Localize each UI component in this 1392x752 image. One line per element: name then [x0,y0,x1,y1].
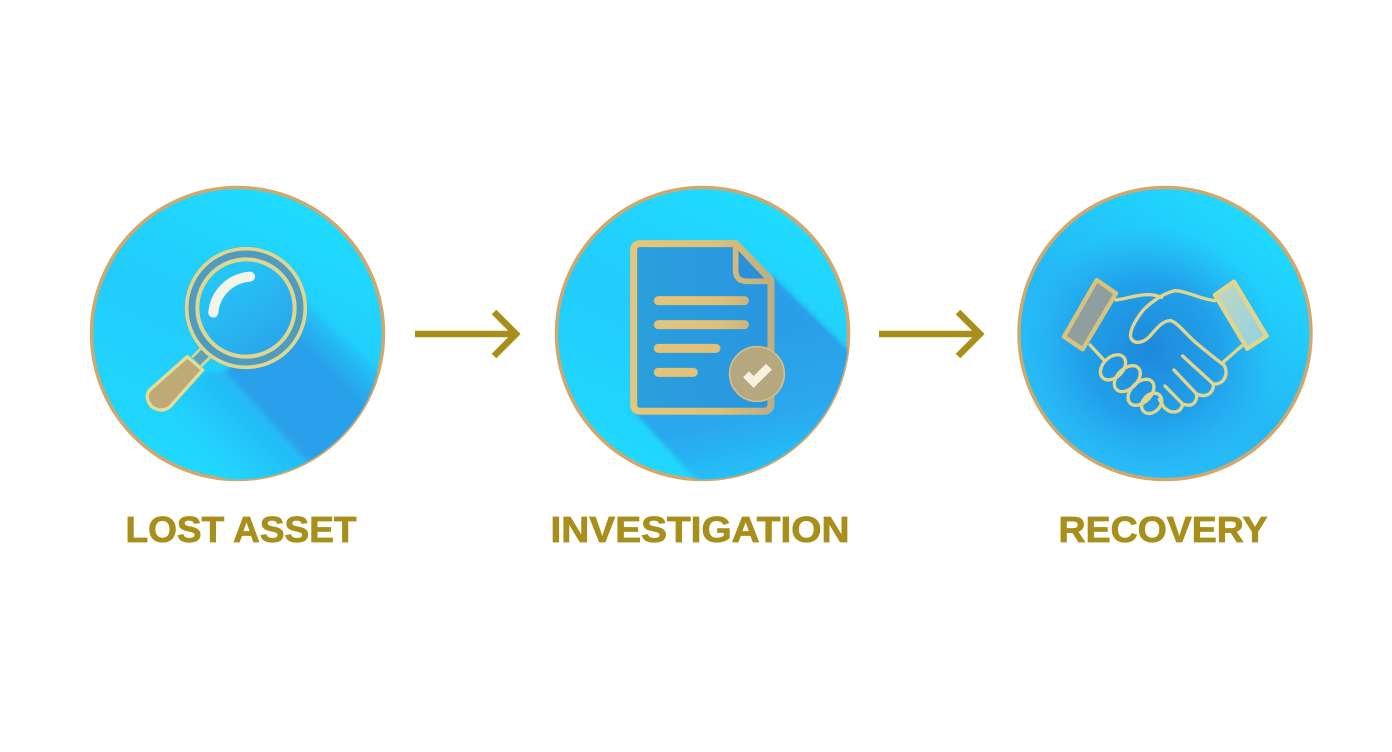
label: lost asset: LOST ASSET [126,509,356,550]
right cuff [1215,282,1267,349]
arrow 1 [415,312,516,356]
long shadow [634,274,848,480]
magnifier handle [147,357,203,410]
label: recovery: RECOVERY [1058,509,1268,550]
badge circle [556,188,848,480]
document page [634,244,771,411]
magnifier ring [191,253,301,363]
left hand knuckles [1096,350,1130,385]
arrow 2 [879,312,980,356]
step 2: investigation [554,186,850,482]
check mark [746,367,769,382]
step 1: lost asset [90,186,386,482]
badge circle [92,188,384,480]
folded corner [736,244,771,281]
lens glare [213,277,250,313]
long shadow [186,303,379,480]
left cuff [1064,280,1116,349]
icon: document with check [634,244,784,411]
fingers [1174,356,1213,395]
check badge [730,347,784,401]
magnifier lens [197,259,295,357]
icon: handshake [1064,280,1267,417]
label: investigation: INVESTIGATION [550,509,850,550]
infographic: three-step asset recovery process [90,186,1313,543]
central glow [1025,225,1275,475]
text lines [658,301,744,372]
magnifier handle neck [197,347,212,362]
icon: magnifying glass [147,249,305,410]
step 3: recovery [1019,188,1311,480]
hands outline [1116,295,1162,300]
badge circle [1019,188,1311,480]
